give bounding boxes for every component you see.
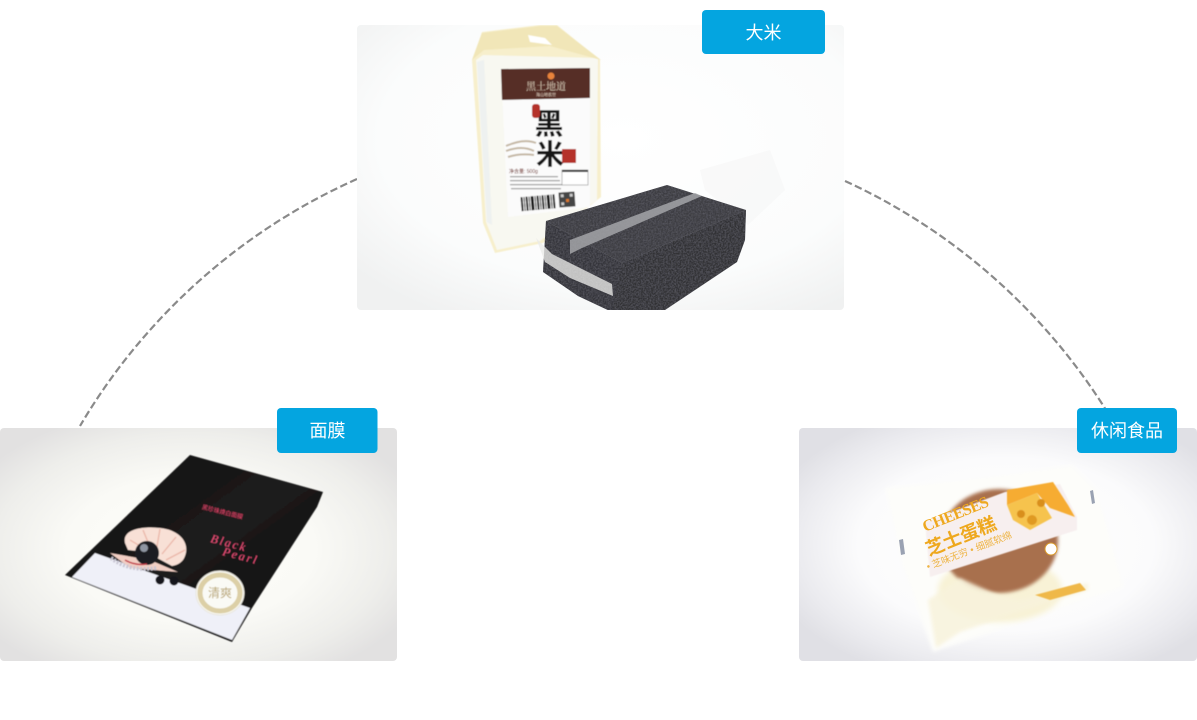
label: snacks [1077, 408, 1177, 453]
package text: slogan: • 芝味无穷 • 细腻软绵 [925, 529, 1014, 573]
rice bag label [501, 68, 590, 217]
rice bag label: 净含量: 500g [509, 168, 538, 175]
script: Black Pearl: Black [209, 531, 249, 555]
panel: black rice photo [357, 25, 844, 312]
script: Black Pearl [210, 534, 258, 564]
label: snacks: 休闲食品 [1091, 421, 1163, 441]
product: black rice block [536, 185, 746, 310]
rice bag label: 黑 [534, 101, 564, 143]
barcode [521, 194, 556, 211]
rice bag label: 黑土地道 [526, 78, 566, 93]
label: face mask: 面膜 [310, 421, 346, 441]
small pearls [156, 576, 164, 584]
seal: 清爽 [208, 586, 232, 600]
shell [110, 528, 186, 572]
logo mark [1045, 543, 1057, 555]
cheese [1007, 482, 1075, 530]
product: cheese cake package [899, 481, 1095, 650]
label: rice: 大米 [746, 23, 782, 43]
seal [196, 571, 244, 615]
package text: CHEESES: CHEESES [920, 494, 991, 536]
script: Black Pearl: Pearl [220, 544, 260, 567]
pouch pink title: 黑珍珠焕白面膜 [201, 503, 244, 521]
label: rice [702, 10, 825, 54]
panel: cheese cake photo [799, 428, 1197, 661]
rice bag label: 米 [536, 133, 564, 173]
QR code [558, 191, 575, 208]
panel: face mask photo [0, 428, 397, 661]
product: rice bag [472, 25, 601, 253]
rice bag label: 海山地农世 [536, 91, 556, 97]
product: black pearl mask pouch [65, 455, 323, 642]
dashed arc: rice to face mask [80, 179, 357, 426]
package text: cheese cake: 芝士蛋糕 [922, 510, 1000, 562]
label: face mask [277, 408, 378, 453]
dashed arc: rice to snacks [845, 181, 1106, 410]
